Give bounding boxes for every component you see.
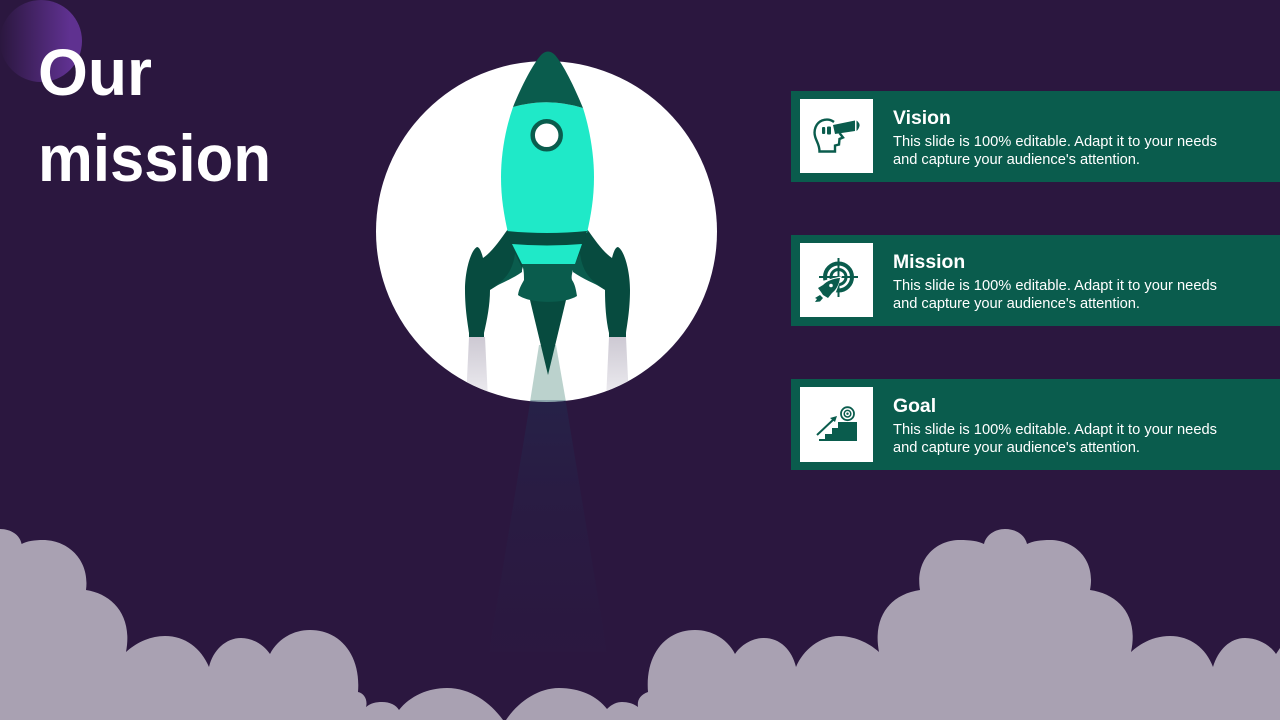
exhaust beam	[525, 345, 571, 438]
text: mission	[38, 121, 271, 195]
icon: target with rocket	[815, 258, 858, 302]
heading: vision: Vision	[893, 107, 951, 129]
left fin and booster	[465, 229, 530, 337]
text: mission: This slide is 100% editable. Adapt it to your needs	[893, 278, 1217, 294]
heading: goal: Goal	[893, 395, 936, 417]
nose cone	[513, 52, 583, 108]
card: vision	[791, 91, 1280, 182]
dark band	[507, 231, 587, 246]
card: mission	[791, 235, 1280, 326]
text: vision: This slide is 100% editable. Adapt it to your needs	[893, 134, 1217, 150]
card: goal: and capture your audience's attention.	[893, 440, 1140, 456]
porthole	[533, 121, 561, 149]
side exhaust trails	[466, 337, 628, 392]
flame	[530, 300, 566, 375]
clouds	[0, 529, 1280, 720]
heading: mission: Mission	[893, 251, 965, 273]
card: goal	[791, 379, 1280, 470]
lower body band	[512, 244, 582, 264]
decorative moon	[0, 0, 82, 82]
right fin and booster	[565, 229, 630, 337]
rocket	[465, 52, 630, 375]
icon: stairs, arrow and target	[817, 407, 857, 441]
text: goal: This slide is 100% editable. Adapt it to your needs	[893, 422, 1217, 438]
icon: head with telescope	[815, 120, 860, 152]
body	[501, 102, 594, 233]
card: vision: and capture your audience's attention.	[893, 152, 1140, 168]
title: Our	[38, 35, 152, 109]
card: mission: and capture your audience's attention.	[893, 296, 1140, 312]
nozzle	[518, 264, 577, 302]
white circle backdrop	[376, 61, 717, 402]
